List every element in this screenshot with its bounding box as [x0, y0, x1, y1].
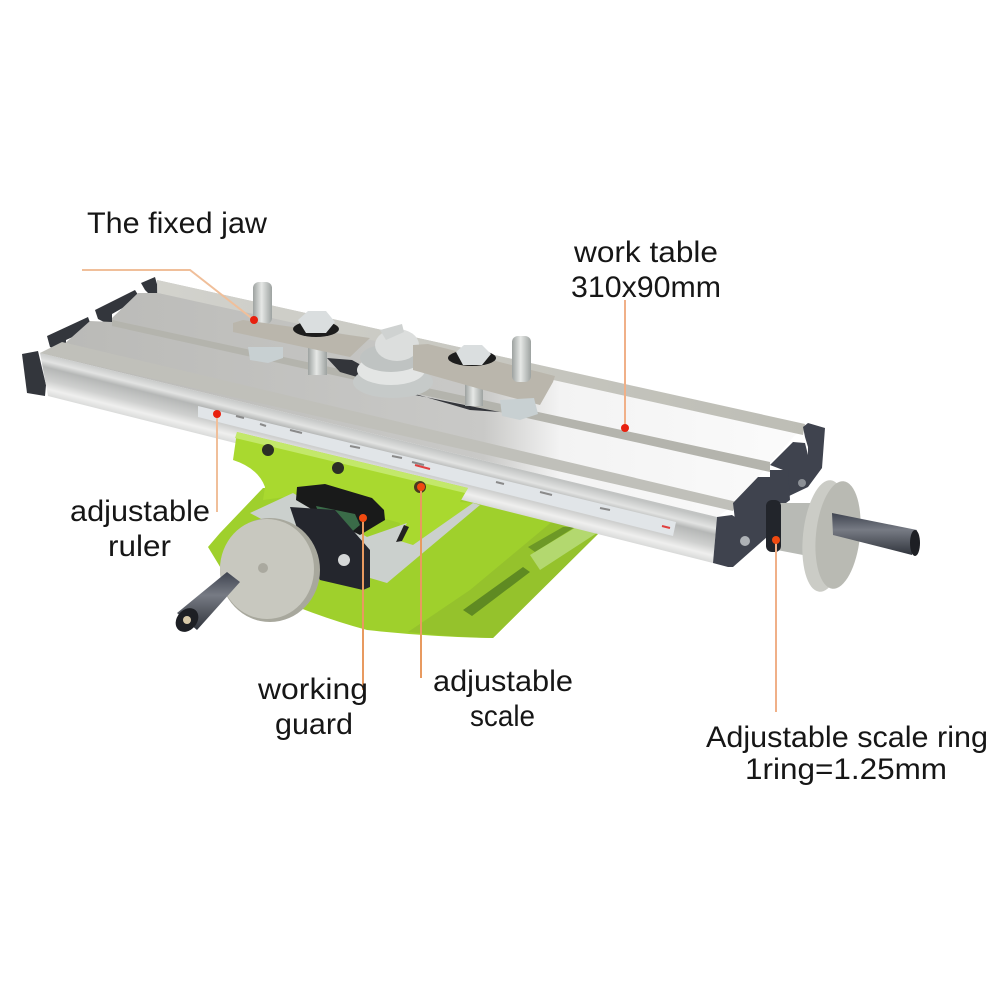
callout: adjustable ruler: ruler	[108, 530, 171, 563]
milling table illustration	[22, 277, 920, 638]
callout: working guard: guard	[275, 708, 353, 741]
callout: work table	[571, 236, 721, 432]
callout: work table: 310x90mm	[571, 271, 721, 304]
callout: adjustable ruler	[70, 410, 221, 563]
top green plate	[233, 432, 473, 545]
callout: working guard	[257, 514, 368, 741]
table rails	[40, 280, 805, 511]
right handwheel	[766, 478, 920, 594]
green base foot	[208, 488, 602, 638]
right crank handle	[832, 513, 917, 555]
center stepped pivot	[353, 324, 433, 398]
left support post	[308, 345, 327, 375]
adjustable ruler strip	[198, 406, 676, 536]
left handwheel	[171, 507, 370, 636]
callout: adjustable scale ring	[706, 536, 988, 786]
right hex bolt base	[500, 398, 538, 420]
left threaded bolt	[253, 282, 272, 324]
right threaded bolt	[512, 336, 531, 382]
table top surface	[40, 280, 805, 517]
callout: the fixed jaw: The fixed jaw	[87, 207, 267, 240]
callout: adjustable scale: scale	[470, 700, 535, 733]
left crank handle	[177, 572, 240, 630]
jaw clamps and bolts	[233, 282, 555, 420]
callout: working guard: working	[257, 673, 368, 706]
callout: adjustable scale: adjustable	[433, 665, 573, 698]
callout: adjustable ruler: adjustable	[70, 495, 210, 528]
foot slots	[463, 567, 530, 616]
right jaw plate	[413, 344, 555, 405]
right support post	[465, 370, 483, 406]
table end blocks left	[22, 277, 160, 396]
callout: work table: work table	[573, 236, 718, 269]
table front face	[40, 353, 717, 563]
callout: adjustable scale ring: 1ring=1.25mm	[745, 753, 947, 786]
front slide bed	[250, 484, 480, 583]
left jaw plate	[233, 320, 370, 357]
callout: adjustable scale	[417, 483, 573, 733]
table end blocks right	[713, 423, 825, 567]
left hex bolt base	[248, 347, 283, 363]
callout: adjustable scale ring: Adjustable scale ring	[706, 721, 988, 754]
callout: the fixed jaw	[82, 207, 267, 324]
left nut	[293, 311, 339, 337]
slot shadow	[327, 358, 500, 412]
right nut	[448, 345, 496, 366]
